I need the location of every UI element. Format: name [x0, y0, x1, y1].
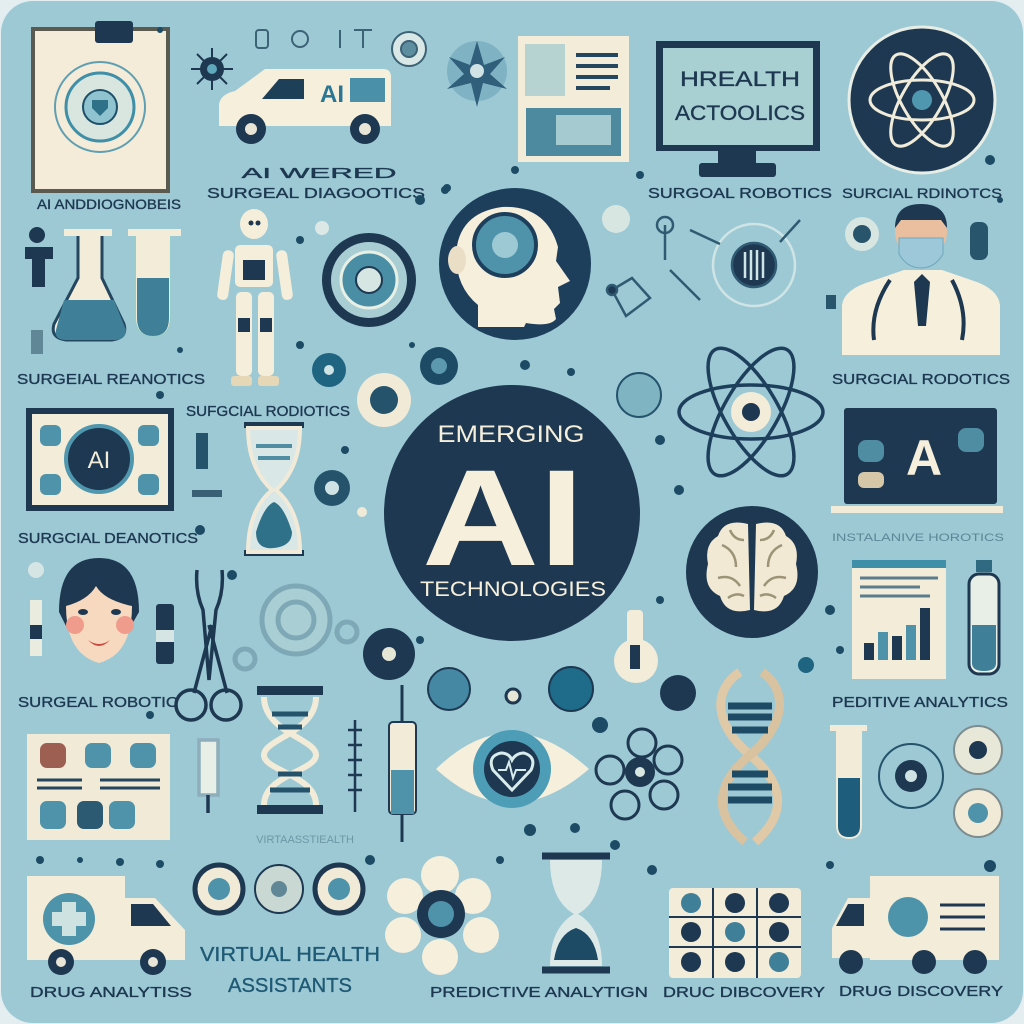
- label: virtual health assistants: [200, 944, 380, 997]
- icon: DNA helix large: [721, 672, 780, 842]
- label: tablet caption: SURGCIAL DEANOTICS: [18, 530, 198, 547]
- label: predictive analytics right: PEDITIVE ANALYTICS: [832, 694, 1008, 711]
- label: robot caption: SUFGCIAL RODIOTICS: [186, 403, 350, 420]
- icon: monitor: [656, 41, 820, 177]
- label: doctor caption: SURGCIAL RODOTICS: [832, 371, 1010, 388]
- icon: AI van: [219, 69, 391, 144]
- icon: AI tablet: AI: [88, 447, 110, 474]
- icon: truck right: [832, 876, 999, 974]
- icon: syringe vial: [389, 685, 416, 842]
- icon: side widgets: [192, 433, 350, 506]
- label: van caption: [207, 165, 425, 202]
- icon: molecule flower: [596, 729, 682, 819]
- center badge: EMERGING: [438, 421, 584, 448]
- icon: gear cluster: [191, 48, 233, 90]
- label: robotics captions top: SURGOAL ROBOTICS: [648, 185, 832, 202]
- icon: large atom: [679, 336, 823, 488]
- icon: A screen: A: [906, 430, 942, 486]
- center badge: AI: [422, 442, 584, 595]
- icon: vials: [28, 562, 174, 664]
- icon: flasks: [53, 229, 181, 340]
- label: van caption: AI WERED: [242, 165, 397, 182]
- icon: dial: [322, 233, 416, 327]
- icon: document panel: [518, 36, 629, 162]
- icon: test tube and dials: [830, 725, 1002, 839]
- icon: brain badge: [686, 506, 818, 638]
- icon: grid calendar: [669, 888, 801, 978]
- icon: DNA strand left: [257, 686, 323, 814]
- label: robotics captions top: SURCIAL RDINOTCS: [842, 185, 1002, 201]
- label: faint caption: INSTALANIVE HOROTICS: [832, 532, 1004, 544]
- label: clipboard caption: AI ANDDIOGNOBEIS: [37, 196, 181, 212]
- label: robotics caption lower: SURGEAL ROBOTIC: [18, 694, 178, 711]
- icon: head with brain: [439, 188, 591, 340]
- icon: monitor: ACTOOLICS: [675, 102, 805, 125]
- icon: AI van: AI: [320, 81, 344, 108]
- icon: three rings: [195, 865, 363, 913]
- icon: robot: [217, 209, 293, 386]
- label: van caption: SURGEAL DIAGOOTICS: [207, 185, 425, 202]
- icon: atom badge: [849, 27, 995, 173]
- icon: right small ornaments: [826, 217, 988, 309]
- icon: scattered dots: [36, 27, 1003, 875]
- icon: dark medallions: [363, 628, 696, 711]
- icon: bar chart report: [852, 560, 946, 679]
- icon: A screen: [831, 408, 1003, 513]
- icon: hourglass upper: [244, 425, 304, 553]
- icon: flower molecule: [385, 856, 499, 975]
- icon: doctor: [842, 204, 1000, 355]
- icon: network diagram: [602, 205, 800, 316]
- label: virtual health assistants: VIRTUAL HEALTH: [200, 944, 380, 966]
- icon: left tool: [25, 227, 53, 354]
- label: robotics captions top: [648, 185, 1002, 202]
- icon: lab flask small: [614, 610, 658, 683]
- icon: eye with heart: [436, 730, 589, 808]
- center badge: TECHNOLOGIES: [420, 578, 606, 601]
- label: virtual health assistants: ASSISTANTS: [228, 975, 352, 997]
- label: drug discovery middle: DRUC DIBCOVERY: [663, 984, 825, 1001]
- icon: test tube right: [969, 560, 999, 674]
- label: reanotics caption: SURGEIAL REANOTICS: [17, 371, 205, 388]
- icon: small top marks: [256, 30, 426, 66]
- label: drug analysis caption: DRUG ANALYTISS: [30, 984, 192, 1001]
- icon: woman face: [59, 558, 139, 663]
- icon: flower disc: [447, 41, 507, 107]
- icon: monitor: HREALTH: [680, 68, 800, 91]
- icon: sample grid panel: [27, 734, 170, 840]
- icon: faint circle cluster: [235, 586, 357, 669]
- icon: stethoscope and scissors: [176, 570, 241, 813]
- center badge: [384, 385, 640, 641]
- label: drug discovery right: DRUG DISCOVERY: [839, 983, 1003, 1000]
- label: predictive analytics bottom: PREDICTIVE ANALYTIGN: [430, 984, 648, 1001]
- icon: ambulance truck left: [27, 876, 185, 975]
- icon: ruler: [348, 720, 362, 812]
- label: faint health caption: VIRTAASSTIEALTH: [256, 834, 354, 846]
- icon: clipboard: [33, 21, 168, 191]
- icon: hourglass lower: [542, 856, 610, 970]
- icon: AI tablet: [26, 408, 174, 511]
